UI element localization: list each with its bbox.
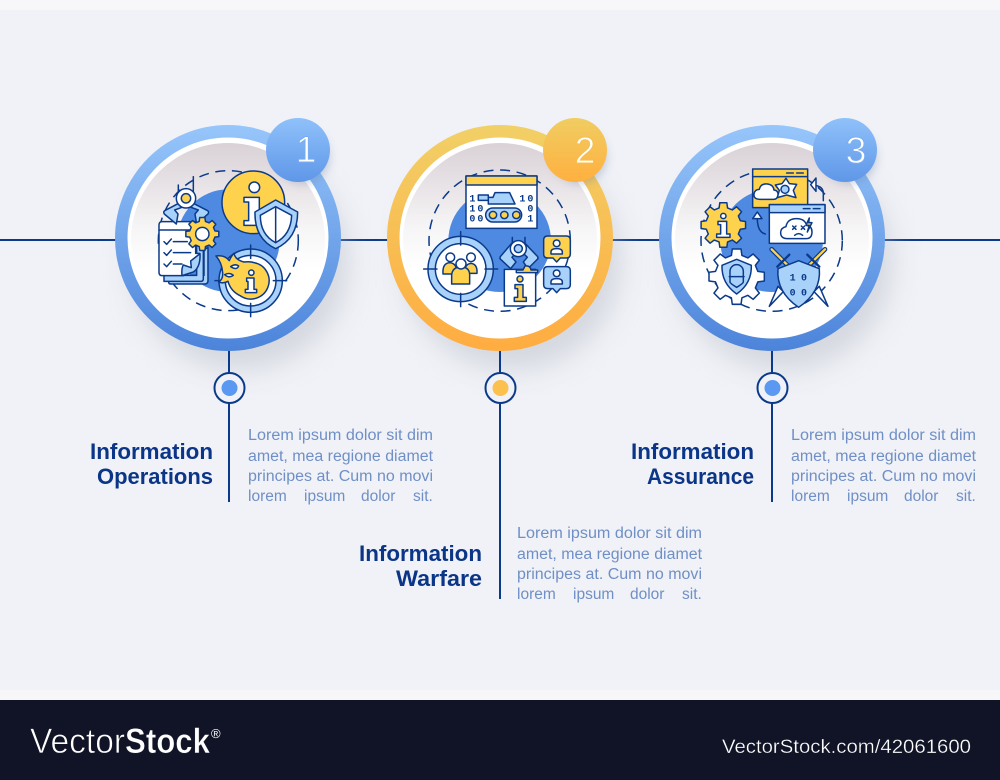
heading: information operations: Information xyxy=(90,439,213,464)
footer logo xyxy=(30,722,221,761)
icon: information warfare: 0 xyxy=(477,203,483,214)
heading: information assurance: Assurance xyxy=(647,464,754,489)
icon: information warfare: 1 xyxy=(469,193,475,204)
footer url: VectorStock.com/42061600 xyxy=(722,736,971,758)
ring xyxy=(115,125,341,351)
ring xyxy=(387,125,613,351)
text block: step 3 description: ipsum xyxy=(847,488,888,505)
text block: step 2 description: amet, mea regione diamet xyxy=(517,546,703,563)
ring xyxy=(659,125,885,351)
icon: information warfare: 1 xyxy=(527,213,533,224)
number badge 1: 1 xyxy=(296,129,316,170)
heading: information assurance xyxy=(631,439,754,489)
number badge 2: 2 xyxy=(575,130,595,171)
icon: information assurance: 0 xyxy=(801,287,807,298)
heading: information warfare xyxy=(359,541,482,591)
footer bar xyxy=(0,700,1000,780)
text block: step 3 description: amet, mea regione diamet xyxy=(791,448,977,465)
text block: step 3 description: sit. xyxy=(956,488,976,505)
number badge 2 xyxy=(543,118,607,183)
icon: information warfare: 0 xyxy=(527,203,533,214)
icon: information warfare: 0 xyxy=(527,193,533,204)
heading: information operations xyxy=(90,439,213,489)
footer logo: Stock xyxy=(125,722,210,761)
icon: information assurance: 0 xyxy=(790,287,796,298)
timeline line xyxy=(0,239,1000,241)
text block: step 1 description: dolor xyxy=(361,488,395,505)
text block: step 1 description: sit. xyxy=(413,488,433,505)
text block: step 3 description: lorem xyxy=(791,488,830,505)
text block: step 2 description: Lorem ipsum dolor sit dim xyxy=(517,525,702,542)
icon: information assurance: 1 xyxy=(790,273,796,284)
text block: step 2 description: dolor xyxy=(630,586,664,603)
panel: step 3 circle xyxy=(659,118,892,370)
connector: step 3 xyxy=(758,351,788,502)
heading: information assurance: Information xyxy=(631,439,754,464)
text block: step 2 description: sit. xyxy=(682,586,702,603)
icon: information warfare: 0 xyxy=(477,213,483,224)
text block: step 1 description: amet, mea regione diamet xyxy=(248,448,434,465)
heading: information warfare: Warfare xyxy=(396,566,482,591)
number badge 3 xyxy=(813,118,877,183)
text block: step 2 description: ipsum xyxy=(573,586,614,603)
footer logo: ® xyxy=(211,726,221,741)
icon: information warfare: 0 xyxy=(469,213,475,224)
icon: information warfare: 1 xyxy=(519,193,525,204)
panel: step 1 circle xyxy=(115,118,348,370)
icon: information assurance xyxy=(701,169,842,311)
text block: step 3 description: principes at. Cum no movi xyxy=(791,468,976,485)
number badge 1 xyxy=(266,118,330,183)
icon: information warfare xyxy=(424,170,570,311)
text block: step 1 description: ipsum xyxy=(304,488,345,505)
footer logo: Vector xyxy=(30,722,125,761)
connector: step 1 xyxy=(214,351,244,502)
text block: step 2 description: principes at. Cum no movi xyxy=(517,566,702,583)
number badge 3: 3 xyxy=(846,130,866,171)
text block: step 3 description: Lorem ipsum dolor sit dim xyxy=(791,427,976,444)
text block: step 3 description: dolor xyxy=(904,488,938,505)
icon: information operations xyxy=(158,171,298,317)
text block: step 1 description: Lorem ipsum dolor sit dim xyxy=(248,427,433,444)
text block: step 1 description xyxy=(248,427,434,505)
heading: information operations: Operations xyxy=(97,464,213,489)
text block: step 2 description: lorem xyxy=(517,586,556,603)
icon: information assurance: 0 xyxy=(801,273,807,284)
text block: step 1 description: principes at. Cum no movi xyxy=(248,468,433,485)
text block: step 2 description xyxy=(517,525,703,603)
text block: step 1 description: lorem xyxy=(248,488,287,505)
text block: step 3 description xyxy=(791,427,977,505)
panel: step 2 circle xyxy=(387,118,620,370)
heading: information warfare: Information xyxy=(359,541,482,566)
connector: step 2 xyxy=(486,351,516,599)
icon: information warfare: 1 xyxy=(469,203,475,214)
